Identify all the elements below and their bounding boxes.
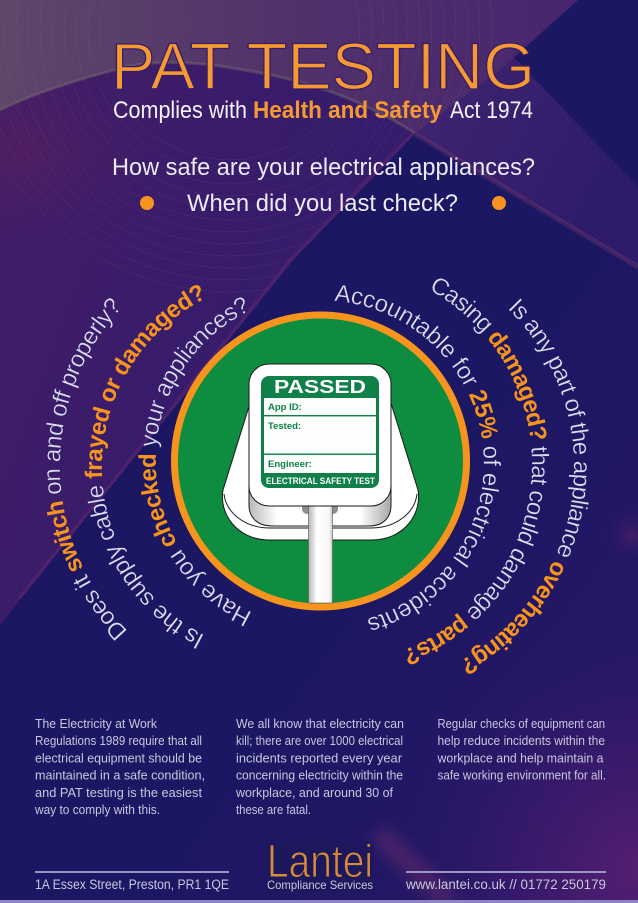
text block: electrical incidents: concerning electricity within the [236, 768, 403, 782]
icon: plug with test label: PASSED [274, 377, 366, 397]
text block: regular checks: Regular checks of equipment can [438, 717, 605, 731]
text block: electrical incidents: kill; there are over 1000 electrical [236, 734, 403, 748]
text block: regular checks [437, 717, 606, 782]
text block: electrical incidents: incidents reported every year [236, 752, 402, 766]
curved text: left outer: Does it switch on and off properly? [46, 298, 127, 641]
text block: regulations: way to comply with this. [34, 803, 160, 817]
icon: plug with test label [222, 364, 419, 603]
question line 2 with bullets: When did you last check? [187, 190, 458, 217]
text block: regular checks: safe working environment for all. [438, 768, 606, 782]
subtitle [113, 97, 533, 124]
text block: electrical incidents: We all know that electricity can [236, 717, 404, 731]
text block: regulations: electrical equipment should be [35, 752, 202, 766]
central badge circle [174, 315, 466, 607]
text block: regulations: maintained in a safe condition, [35, 768, 205, 782]
curved text: left middle: Is the supply cable frayed or damaged? [84, 285, 204, 649]
curved text: right outer: Is any part of the appliance overheating? [464, 298, 589, 674]
text block: regular checks: workplace and help maintain a [437, 752, 604, 766]
icon: plug with test label: Tested: [268, 421, 301, 432]
icon: plug with test label: App ID: [268, 402, 302, 413]
curved text: right middle: Casing damaged? that could damage parts? [408, 278, 550, 664]
footer: address: 1A Essex Street, Preston, PR1 1QE [35, 877, 229, 892]
icon: plug with test label: Engineer: [268, 459, 312, 470]
text block: regulations [34, 717, 205, 817]
footer: contact: www.lantei.co.uk // 01772 250179 [405, 877, 606, 892]
subtitle: Complies with [113, 97, 247, 124]
text block: regulations: The Electricity at Work [35, 717, 158, 731]
logo: Lantei: Compliance Services [267, 878, 373, 892]
subtitle: Act 1974 [450, 97, 533, 124]
curved text: left inner: Have you checked your appliances? [138, 297, 251, 626]
text block: electrical incidents: these are fatal. [236, 803, 311, 817]
text block: regular checks: help reduce incidents within the [438, 734, 605, 748]
text block: regulations: and PAT testing is the easiest [35, 786, 203, 800]
text block: regulations: Regulations 1989 require that all [35, 734, 202, 748]
icon: plug with test label: ELECTRICAL SAFETY TEST [266, 476, 375, 486]
logo: Lantei: Lantei [267, 835, 373, 887]
text block: electrical incidents: workplace, and around 30 of [235, 786, 394, 800]
subtitle: Health and Safety [253, 97, 443, 124]
curved text: right inner: Accountable for 25% of electrical accidents [334, 285, 502, 630]
text block: electrical incidents [235, 717, 404, 817]
question line 1: How safe are your electrical appliances? [112, 154, 535, 181]
title: PAT TESTING [111, 29, 535, 103]
